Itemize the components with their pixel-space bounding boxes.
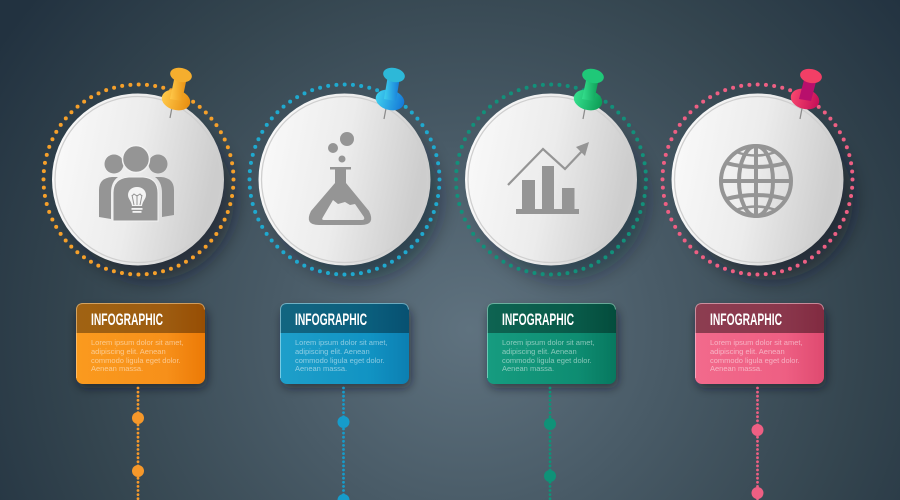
disc shadow xyxy=(483,120,647,280)
card heading: INFOGRAPHIC xyxy=(91,311,163,329)
card: orange xyxy=(76,303,207,388)
dotted ring: orange xyxy=(44,84,234,274)
card text: Aenean massa. xyxy=(91,364,143,373)
pin: pink xyxy=(788,67,823,119)
card text: adipiscing elit. Aenean xyxy=(295,347,370,356)
card text: commodo ligula eget dolor. xyxy=(91,356,181,365)
card text: commodo ligula eget dolor. xyxy=(502,356,592,365)
card text: Aenean massa. xyxy=(710,364,762,373)
card text: commodo ligula eget dolor. xyxy=(295,356,385,365)
panel: globe xyxy=(662,67,853,280)
card text: Aenean massa. xyxy=(502,364,554,373)
card text: Aenean massa. xyxy=(295,364,347,373)
card heading: INFOGRAPHIC xyxy=(295,311,367,329)
panel: flask xyxy=(250,66,440,280)
card heading: INFOGRAPHIC xyxy=(710,311,782,329)
card text: commodo ligula eget dolor. xyxy=(710,356,800,365)
dotted ring: pink xyxy=(662,84,852,274)
connector: blue xyxy=(338,388,350,500)
icon: people with light bulb xyxy=(99,146,174,221)
card text: adipiscing elit. Aenean xyxy=(502,347,577,356)
card heading: INFOGRAPHIC xyxy=(502,311,574,329)
disc shadow xyxy=(276,120,440,280)
icon: globe xyxy=(721,146,791,216)
pin: green xyxy=(571,67,605,119)
icon: bar chart with arrow xyxy=(508,142,589,214)
disc xyxy=(52,94,224,266)
pin: blue xyxy=(373,66,407,119)
dotted ring: green xyxy=(456,84,646,274)
card text: adipiscing elit. Aenean xyxy=(710,347,785,356)
card text: Lorem ipsum dolor sit amet, xyxy=(502,338,595,347)
connector: green xyxy=(544,388,556,500)
card: green xyxy=(487,303,618,388)
dotted ring: blue xyxy=(250,84,440,274)
disc shadow xyxy=(689,120,853,280)
panel: people xyxy=(44,66,234,280)
card text: Lorem ipsum dolor sit amet, xyxy=(91,338,184,347)
card text: Lorem ipsum dolor sit amet, xyxy=(295,338,388,347)
disc xyxy=(258,94,430,266)
icon: flask xyxy=(309,132,371,225)
connector: pink xyxy=(752,388,764,500)
disc shadow xyxy=(70,120,234,280)
disc xyxy=(465,94,637,266)
card: blue xyxy=(280,303,411,388)
panel: growth chart xyxy=(456,67,647,280)
card text: Lorem ipsum dolor sit amet, xyxy=(710,338,803,347)
card: pink xyxy=(695,303,826,388)
disc xyxy=(672,94,844,266)
pin: orange xyxy=(159,66,193,118)
card text: adipiscing elit. Aenean xyxy=(91,347,166,356)
connector: orange xyxy=(132,388,144,500)
